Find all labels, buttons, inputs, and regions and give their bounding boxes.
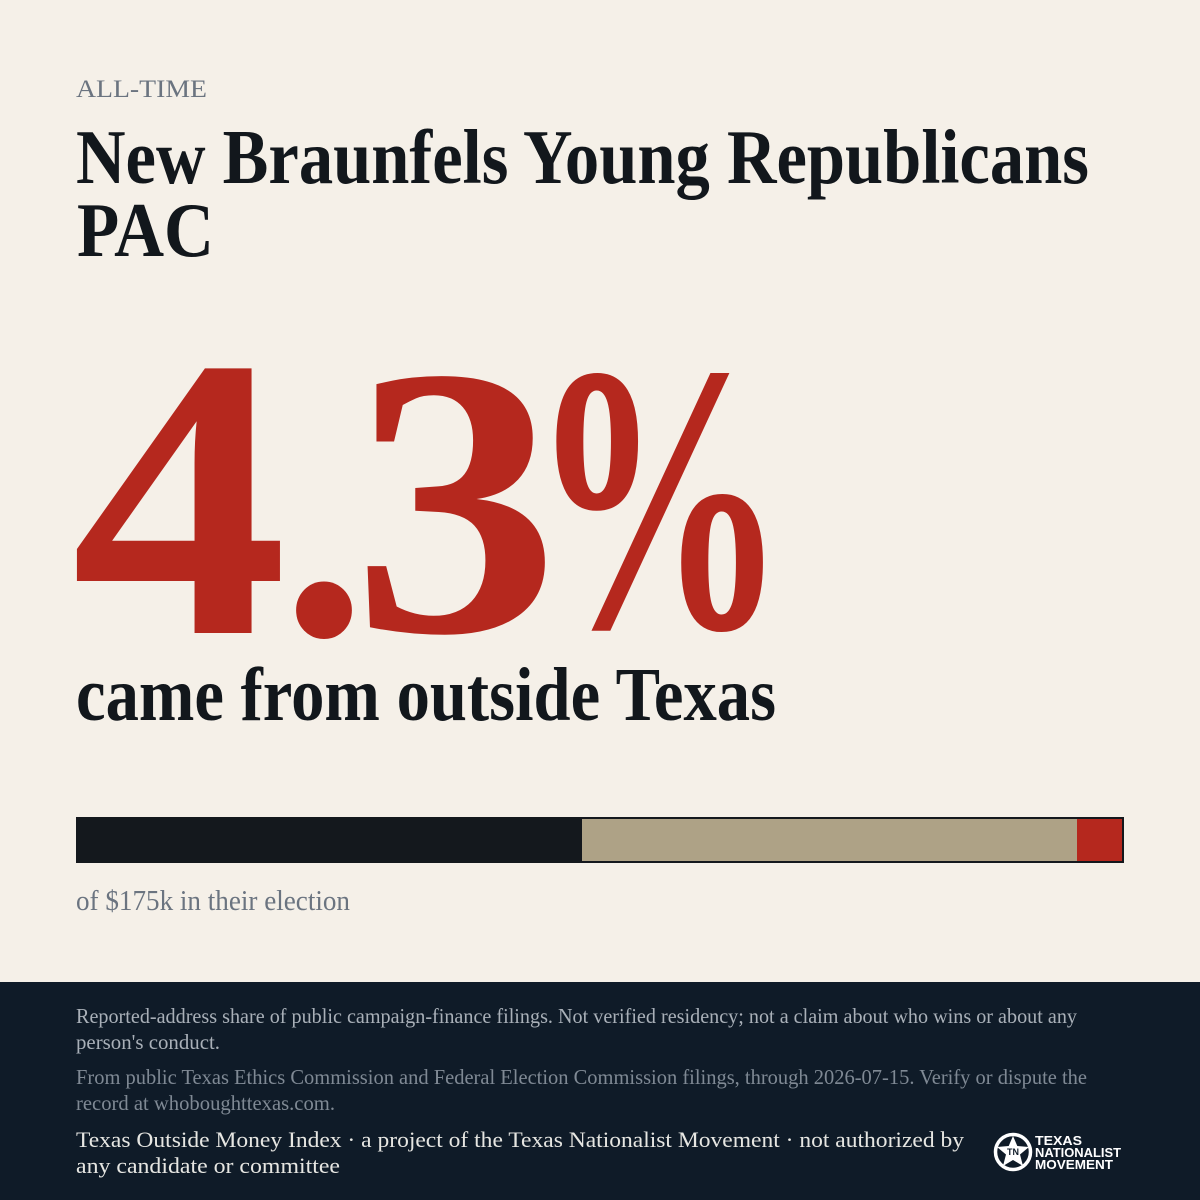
- headline statistic: %: [530, 287, 787, 710]
- headline statistic: 3: [352, 289, 559, 715]
- logo wordmark: [1035, 1133, 1121, 1172]
- disclaimer text: person's conduct.: [76, 1030, 220, 1054]
- attribution text: [76, 1127, 964, 1178]
- bar segment: tan: [582, 819, 1077, 861]
- statistic caption: came from outside Texas: [76, 653, 776, 737]
- headline statistic: 4: [71, 275, 288, 720]
- logo: Texas Nationalist Movement: [996, 1133, 1121, 1172]
- bar caption: of $175k in their election: [76, 885, 350, 917]
- logo wordmark: NATIONALIST: [1035, 1145, 1121, 1160]
- attribution text: any candidate or committee: [76, 1153, 340, 1178]
- logo wordmark: TEXAS: [1035, 1133, 1082, 1148]
- logo wordmark: MOVEMENT: [1035, 1157, 1113, 1172]
- eyebrow: time period: ALL-TIME: [76, 76, 207, 103]
- bar segment: outside Texas: [1077, 819, 1122, 861]
- share bar: [76, 817, 1124, 863]
- source text: record at whoboughttexas.com.: [76, 1091, 335, 1115]
- source text: [76, 1065, 1087, 1115]
- disclaimer text: [76, 1004, 1077, 1054]
- title: New Braunfels Young Republicans: [76, 114, 1089, 200]
- title: PAC: [77, 187, 214, 273]
- icon: star in ring: TN: [1007, 1147, 1019, 1157]
- title: [76, 114, 1089, 273]
- footer panel: [0, 982, 1200, 1200]
- attribution text: Texas Outside Money Index · a project of the Texas Nationalist Movement · not authorized by: [76, 1127, 964, 1152]
- headline statistic: .: [281, 318, 367, 711]
- disclaimer text: Reported-address share of public campaign-finance filings. Not verified residency; not a claim about who wins or about any: [76, 1004, 1077, 1028]
- source text: From public Texas Ethics Commission and Federal Election Commission filings, through 2026-07-15. Verify or dispute the: [76, 1065, 1087, 1089]
